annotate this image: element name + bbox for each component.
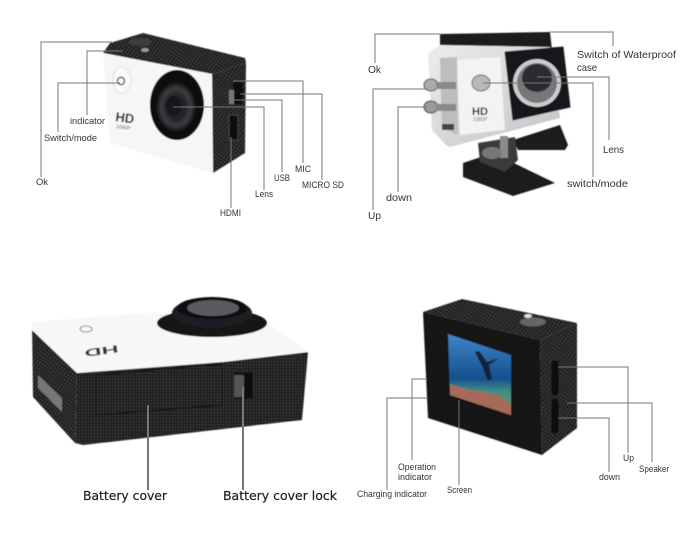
callout: Ok: Ok bbox=[36, 177, 48, 188]
callout: Operation indicator bbox=[398, 379, 436, 483]
callout: Lens bbox=[173, 107, 273, 200]
callout: Screen: Screen bbox=[447, 485, 472, 496]
callout: Ok bbox=[368, 34, 440, 76]
panel: camera front view bbox=[36, 33, 344, 219]
callout: indicator bbox=[70, 51, 123, 127]
callout: Up: Up bbox=[368, 210, 381, 222]
callout: USB: USB bbox=[274, 173, 290, 184]
callout: switch/mode: switch/mode bbox=[567, 178, 628, 190]
callout: down: down bbox=[386, 192, 412, 204]
callout: MIC: MIC bbox=[295, 164, 311, 175]
camera body, front view: 1080P bbox=[116, 124, 132, 132]
callout: Battery cover lock bbox=[223, 387, 337, 503]
callout: Ok bbox=[36, 42, 112, 188]
camera in housing with mount bbox=[424, 32, 570, 196]
callout: Battery cover bbox=[83, 405, 167, 503]
callout: Switch of Waterproof case: case bbox=[577, 62, 597, 74]
callout: MICRO SD bbox=[240, 94, 344, 191]
panel: camera rear view bbox=[357, 299, 669, 500]
camera body, front view bbox=[103, 33, 246, 173]
callout: Lens: Lens bbox=[603, 144, 624, 156]
callout: Switch/mode: Switch/mode bbox=[44, 133, 97, 144]
callout: HDMI: HDMI bbox=[220, 208, 241, 219]
panel: camera battery side bbox=[32, 297, 337, 503]
callout: Operation indicator: Operation bbox=[398, 462, 436, 473]
camera body, front view: HD bbox=[115, 109, 135, 127]
callout: USB bbox=[233, 100, 290, 184]
camera in housing with mount: 1080P bbox=[473, 117, 488, 123]
callout: Switch of Waterproof case bbox=[550, 32, 676, 74]
callout: Speaker: Speaker bbox=[639, 464, 669, 475]
callout: switch/mode bbox=[483, 83, 628, 190]
callout: Battery cover: Battery cover bbox=[83, 489, 167, 503]
callout: Charging indicator bbox=[357, 398, 427, 500]
callout: down: down bbox=[599, 472, 620, 483]
callout: down bbox=[558, 418, 620, 483]
callout: Up bbox=[558, 367, 634, 464]
callout: Up: Up bbox=[623, 453, 634, 464]
callout: MIC bbox=[233, 81, 311, 175]
camera body, battery side bbox=[32, 297, 308, 445]
camera in housing with mount: HD bbox=[472, 106, 488, 118]
camera body, battery side: HD bbox=[84, 343, 119, 359]
callout: Battery cover lock: Battery cover lock bbox=[223, 489, 337, 503]
callout: Lens bbox=[537, 77, 624, 156]
callout: indicator: indicator bbox=[70, 116, 105, 127]
callout: Screen bbox=[447, 400, 472, 496]
callout: Lens: Lens bbox=[255, 189, 273, 200]
callout: Operation indicator: indicator bbox=[398, 472, 432, 483]
callout: Switch/mode bbox=[44, 83, 120, 144]
screen bbox=[448, 334, 511, 415]
camera body, rear view bbox=[423, 299, 577, 455]
callout: Switch of Waterproof case: Switch of Waterproof bbox=[577, 49, 676, 61]
callout: Ok: Ok bbox=[368, 64, 382, 76]
callout: Up bbox=[368, 89, 427, 222]
callout: Charging indicator: Charging indicator bbox=[357, 489, 427, 500]
callout: Speaker bbox=[567, 403, 669, 475]
panel: camera in waterproof case bbox=[368, 32, 676, 222]
callout: HDMI bbox=[220, 137, 241, 219]
callout: down bbox=[386, 107, 427, 204]
callout: MICRO SD: MICRO SD bbox=[302, 180, 344, 191]
